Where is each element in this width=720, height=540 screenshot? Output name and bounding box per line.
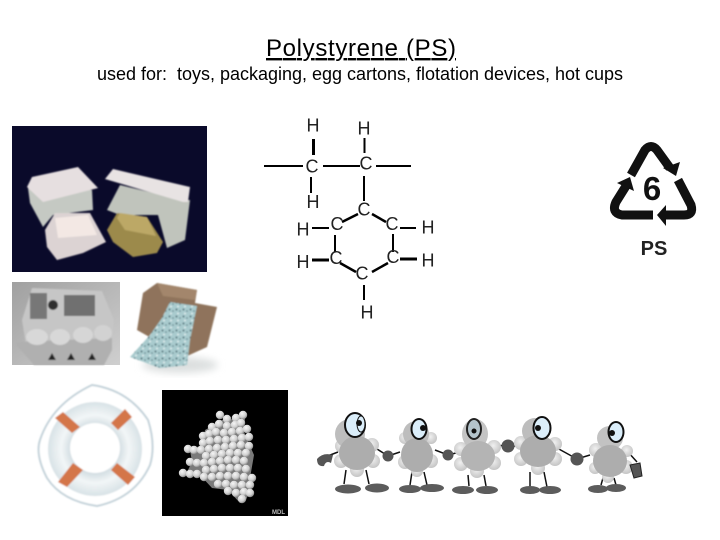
recycling symbol 6 PS: PS bbox=[641, 238, 667, 260]
chemical structure of polystyrene: H bbox=[296, 220, 310, 240]
photo: foam food containers bbox=[12, 126, 207, 272]
recycling symbol 6 PS bbox=[614, 146, 692, 260]
chemical structure of polystyrene: H bbox=[422, 250, 434, 270]
chemical structure of polystyrene bbox=[264, 116, 434, 322]
chemical structure of polystyrene: C bbox=[386, 214, 398, 234]
character 4 bbox=[514, 417, 584, 494]
character 3 bbox=[452, 419, 514, 494]
icon: life ring bbox=[39, 385, 153, 506]
chemical structure of polystyrene: H bbox=[422, 218, 434, 238]
chemical structure of polystyrene: C bbox=[386, 247, 400, 267]
chemical structure of polystyrene: H bbox=[360, 302, 374, 322]
subtitle: uses: used for: toys, packaging, egg cartons, flotation devices, hot cups bbox=[97, 64, 623, 84]
arms linking the characters bbox=[325, 445, 637, 487]
chemical structure of polystyrene: C bbox=[330, 248, 342, 268]
character 5 bbox=[588, 422, 642, 493]
title: Polystyrene (PS) bbox=[266, 35, 456, 62]
chemical structure of polystyrene: C bbox=[356, 264, 368, 284]
photo: 3D molecular model of polystyrene: MDL bbox=[272, 510, 285, 516]
photo: box of packing peanuts bbox=[130, 283, 218, 373]
character 2 bbox=[398, 419, 454, 493]
chemical structure of polystyrene: H bbox=[296, 252, 310, 272]
recycling symbol 6 PS: 6 bbox=[643, 170, 661, 207]
chemical structure of polystyrene: C bbox=[358, 200, 370, 220]
cartoon polystyrene characters holding hands bbox=[317, 413, 642, 494]
chemical structure of polystyrene: H bbox=[358, 118, 370, 138]
character 1 bbox=[317, 413, 394, 494]
chemical structure of polystyrene: C bbox=[306, 156, 318, 176]
chemical structure of polystyrene: C bbox=[360, 154, 372, 174]
chemical structure of polystyrene: H bbox=[306, 192, 320, 212]
chemical structure of polystyrene: H bbox=[306, 116, 320, 136]
chemical structure of polystyrene: C bbox=[330, 214, 344, 234]
photo: egg carton bbox=[12, 282, 120, 365]
photo: 3D molecular model of polystyrene bbox=[162, 390, 288, 516]
